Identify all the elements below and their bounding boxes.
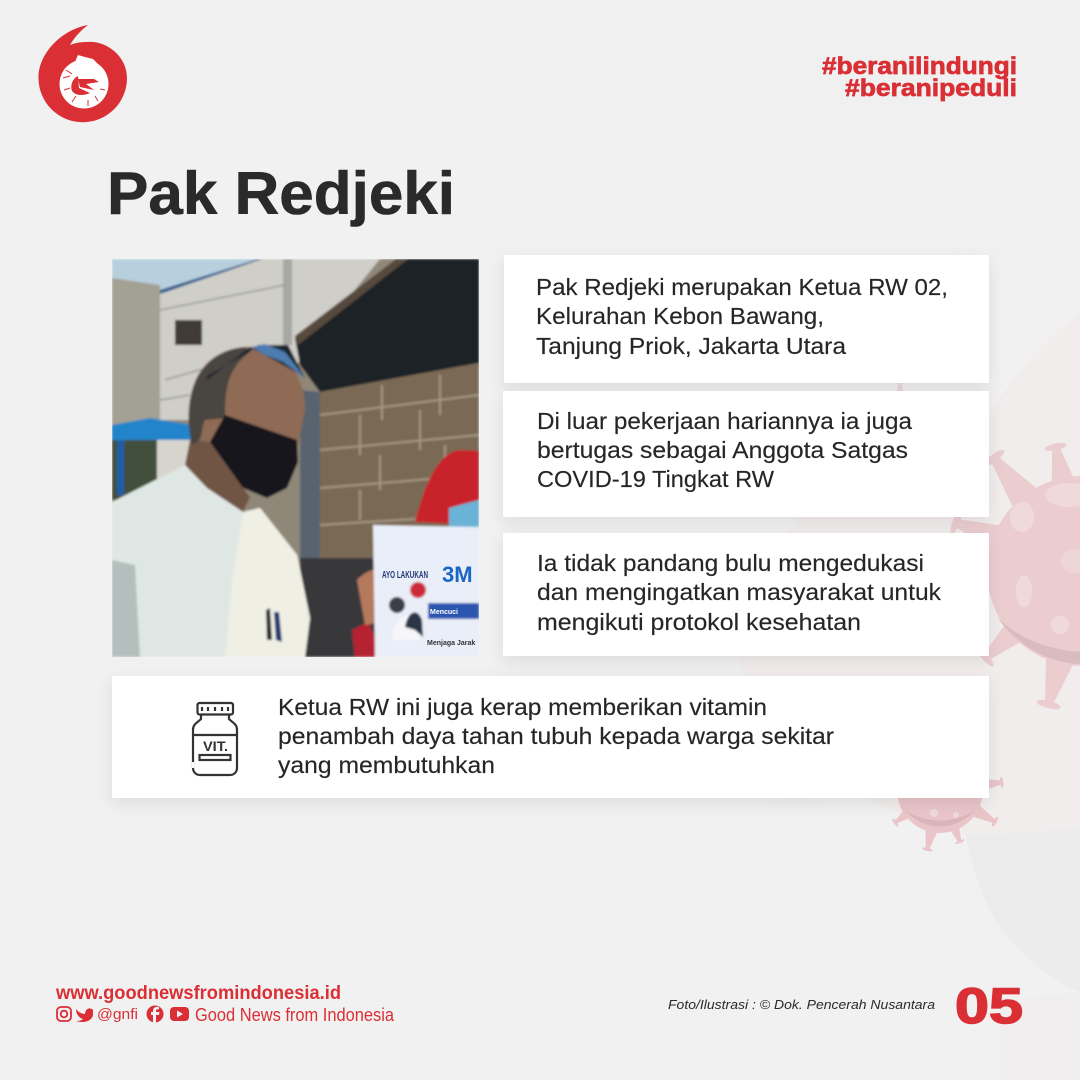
title: Pak Redjeki bbox=[107, 160, 455, 227]
photo: 3M bbox=[442, 562, 473, 587]
hashtags: #beranilindungi bbox=[822, 53, 1017, 80]
card 4: Ketua RW ini juga kerap memberikan vitamin bbox=[278, 694, 767, 720]
card 1: Tanjung Priok, Jakarta Utara bbox=[536, 333, 846, 359]
icon: youtube bbox=[170, 1007, 189, 1021]
card 2 bbox=[503, 391, 989, 517]
photo: AYO LAKUKAN bbox=[382, 570, 428, 581]
handle: @gnfi bbox=[97, 1006, 138, 1023]
icon: vitamin bottle bbox=[193, 703, 237, 775]
card 2: bertugas sebagai Anggota Satgas bbox=[537, 437, 908, 463]
logo bbox=[38, 25, 127, 122]
photo: Menjaga Jarak bbox=[427, 640, 475, 647]
virus: faint grey bbox=[764, 793, 828, 857]
card 1 bbox=[504, 255, 989, 383]
card 4: penambah daya tahan tubuh kepada warga sekitar bbox=[278, 723, 834, 749]
icon: vitamin bottle: VIT. bbox=[203, 738, 228, 754]
card 2: COVID-19 Tingkat RW bbox=[537, 466, 774, 492]
photo: Mencuci bbox=[430, 609, 458, 616]
card 3: mengikuti protokol kesehatan bbox=[537, 609, 861, 635]
page number: 05 bbox=[955, 978, 1023, 1034]
virus: small bbox=[890, 747, 1004, 852]
page name: Good News from Indonesia bbox=[195, 1005, 395, 1025]
card 4 bbox=[112, 676, 989, 798]
photo bbox=[112, 259, 479, 657]
icon: facebook bbox=[146, 1006, 164, 1023]
footer: website: www.goodnewsfromindonesia.id bbox=[55, 983, 341, 1004]
card 3: dan mengingatkan masyarakat untuk bbox=[537, 579, 942, 605]
hashtags bbox=[822, 53, 1017, 102]
card 1: Kelurahan Kebon Bawang, bbox=[536, 303, 824, 329]
card 3: Ia tidak pandang bulu mengedukasi bbox=[537, 550, 924, 576]
card 2: Di luar pekerjaan hariannya ia juga bbox=[537, 408, 912, 434]
icon: instagram bbox=[57, 1007, 71, 1021]
card 1: Pak Redjeki merupakan Ketua RW 02, bbox=[536, 274, 948, 300]
card 3 bbox=[503, 533, 989, 656]
photo credit: Foto/Ilustrasi : © Dok. Pencerah Nusantara bbox=[668, 997, 935, 1012]
virus: large bbox=[947, 441, 1080, 712]
icon: twitter bbox=[76, 1008, 93, 1022]
card 4: yang membutuhkan bbox=[278, 752, 495, 778]
footer: social icons bbox=[57, 1005, 395, 1025]
hashtags: #beranipeduli bbox=[845, 75, 1017, 102]
virus: faint top bbox=[868, 381, 932, 462]
